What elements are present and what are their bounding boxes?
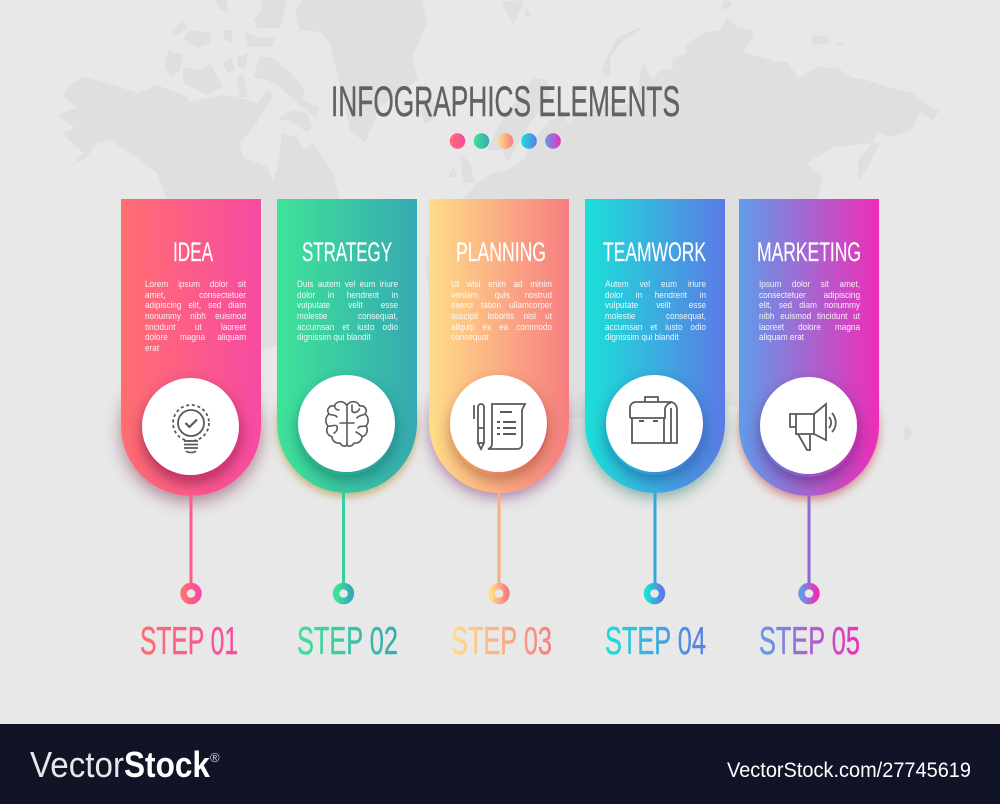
text: teamwork: dolor in hendrerit in	[605, 290, 706, 300]
text: teamwork: vulputate velit esse	[605, 300, 706, 310]
step 03	[451, 493, 552, 663]
text: marketing: nibh euismod tincidunt ut	[759, 311, 860, 321]
footer logo: Vector	[30, 744, 124, 785]
heading: teamwork: TEAMWORK	[603, 237, 706, 267]
icon: light bulb with check	[172, 404, 210, 454]
footer logo: Stock	[124, 744, 211, 785]
text: planning: Ut wisi enim ad minim	[451, 279, 552, 289]
text: idea	[145, 279, 246, 353]
text: idea: Lorem ipsum dolor sit	[145, 279, 246, 289]
footer bar	[0, 724, 1000, 804]
icon: pen and document	[473, 403, 526, 451]
text: marketing: aliquam erat	[759, 332, 804, 342]
text: strategy: dolor in hendrerit in	[297, 290, 398, 300]
step 01: STEP 01	[140, 620, 238, 663]
text: idea: erat	[145, 343, 159, 353]
text: teamwork: molestie consequat,	[605, 311, 706, 321]
panel: marketing	[733, 199, 885, 506]
text: strategy: dignissim qui blandit	[297, 332, 371, 342]
heading: idea: IDEA	[173, 237, 213, 267]
footer url: VectorStock.com/27745619	[727, 759, 971, 782]
panel: teamwork	[576, 199, 734, 507]
panel: idea	[110, 199, 272, 512]
text: idea: adipiscing elit, sed diam	[145, 300, 246, 310]
heading: strategy: STRATEGY	[302, 237, 392, 267]
title: INFOGRAPHICS ELEMENTS	[331, 78, 680, 126]
text: strategy	[297, 279, 398, 342]
footer logo	[30, 744, 220, 785]
text: teamwork	[605, 279, 706, 342]
step 04: STEP 04	[605, 620, 706, 663]
text: teamwork: Autem vel eum iriure	[605, 279, 706, 289]
panel: planning	[420, 199, 578, 508]
footer logo: ®	[210, 750, 220, 765]
icon: megaphone	[789, 402, 837, 451]
heading: planning: PLANNING	[456, 237, 546, 267]
text: marketing: elit, sed diam nonummy	[759, 300, 860, 310]
text: planning: veniam, quis nostrud	[451, 290, 552, 300]
text: planning: aliquip ex ea commodo	[451, 322, 552, 332]
text: marketing	[759, 279, 860, 342]
step 04	[605, 493, 706, 663]
icon: briefcase	[629, 396, 678, 444]
text: planning: consequat	[451, 332, 489, 342]
step 05	[759, 496, 860, 663]
text: teamwork: dignissim qui blandit	[605, 332, 679, 342]
text: strategy: vulputate velit esse	[297, 300, 398, 310]
text: marketing: Ipsum dolor sit amet,	[759, 279, 860, 289]
text: teamwork: accumsan et iusto odio	[605, 322, 706, 332]
step 05: STEP 05	[759, 620, 860, 663]
step 03: STEP 03	[451, 620, 552, 663]
title colour dots	[450, 133, 561, 149]
panel: strategy	[272, 199, 422, 502]
text: strategy: Duis autem vel eum iriure	[297, 279, 398, 289]
text: marketing: consectetuer adipiscing	[759, 290, 860, 300]
text: idea: dolore magna aliquam	[145, 332, 246, 342]
text: strategy: molestie consequat,	[297, 311, 398, 321]
text: marketing: laoreet dolore magna	[759, 322, 860, 332]
text: strategy: accumsan et iusto odio	[297, 322, 398, 332]
text: planning	[451, 279, 552, 342]
text: idea: nonummy nibh euismod	[145, 311, 246, 321]
text: idea: tincidunt ut laoreet	[145, 322, 246, 332]
heading: marketing: MARKETING	[757, 237, 861, 267]
step 01	[140, 496, 238, 663]
text: planning: exerci tation ullamcorper	[451, 300, 552, 310]
text: idea: amet, consectetuer	[145, 290, 246, 300]
step 02	[297, 492, 398, 663]
icon: brain	[325, 400, 369, 447]
step 02: STEP 02	[297, 620, 398, 663]
text: planning: suscipit lobortis nisl ut	[451, 311, 552, 321]
